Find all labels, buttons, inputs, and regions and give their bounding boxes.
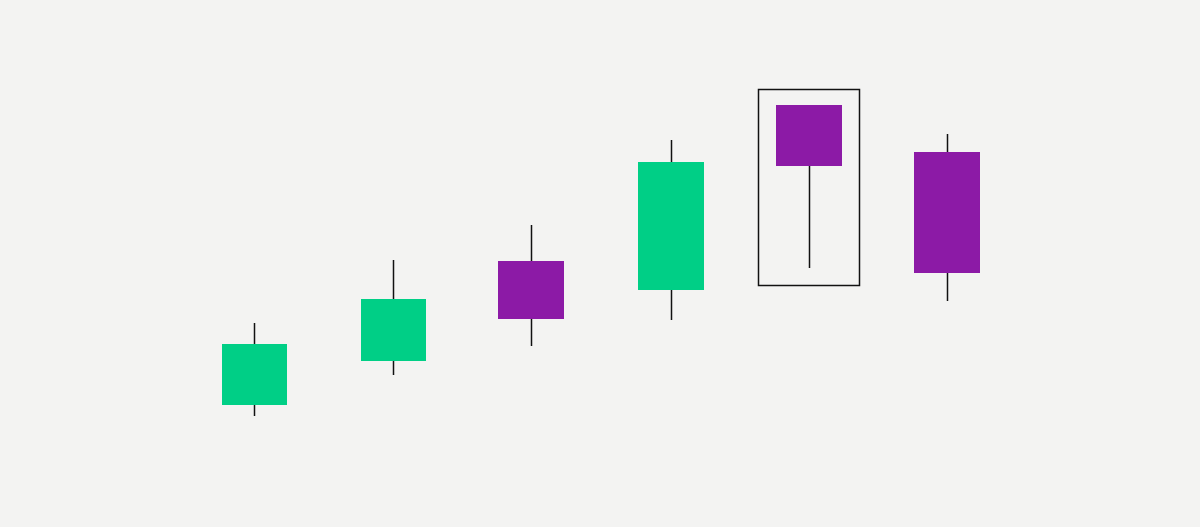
candle 3: bearish <box>498 225 564 346</box>
candle 4: bullish <box>638 140 704 320</box>
candle 6: bearish <box>914 134 980 301</box>
candle 1: bullish <box>222 323 287 416</box>
candle 5: hanging man highlighted <box>758 90 860 286</box>
candle 2: bullish <box>361 260 426 375</box>
